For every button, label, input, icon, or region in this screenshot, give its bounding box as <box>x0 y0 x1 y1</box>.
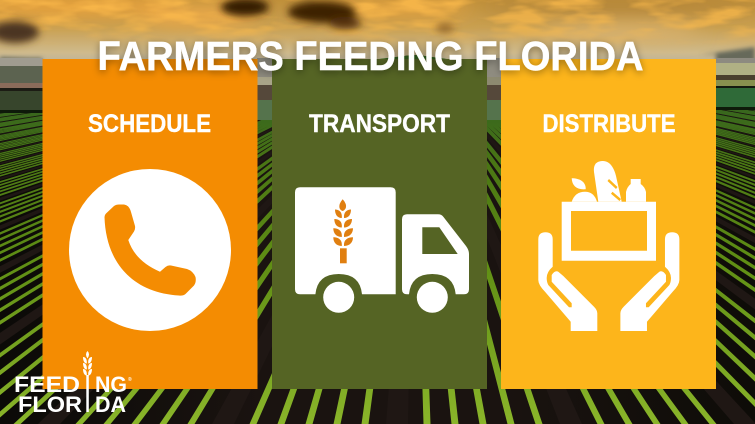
icon: right hand <box>620 232 679 331</box>
heading: transport: TRANSPORT <box>309 110 450 138</box>
logo: feeding florida: NG <box>95 372 127 397</box>
horizon fields: center gaps <box>257 58 501 120</box>
horizon fields: right strip <box>716 58 755 110</box>
logo wheat <box>83 351 92 412</box>
panel: distribute <box>501 59 716 389</box>
logo: feeding florida: DA <box>95 392 126 417</box>
logo: feeding florida: ® <box>128 376 132 383</box>
panel: schedule <box>42 59 258 389</box>
icon: wheat ear <box>333 199 353 263</box>
background: sunset sky with clouds <box>0 0 755 62</box>
logo: feeding florida: FLOR <box>18 392 82 417</box>
icon: left hand <box>538 232 597 331</box>
logo: feeding florida: FEED <box>14 372 80 397</box>
heading: distribute: DISTRIBUTE <box>542 110 676 138</box>
title: FARMERS FEEDING FLORIDA <box>98 33 644 79</box>
icon: delivery truck with wheat <box>295 187 469 313</box>
icon: food box held by hands <box>538 161 679 331</box>
heading: schedule: SCHEDULE <box>88 110 211 138</box>
icon: phone in circle <box>69 169 231 331</box>
horizon fields: left strip <box>0 58 43 113</box>
logo: feeding florida <box>14 351 132 417</box>
panel: transport <box>272 59 487 389</box>
